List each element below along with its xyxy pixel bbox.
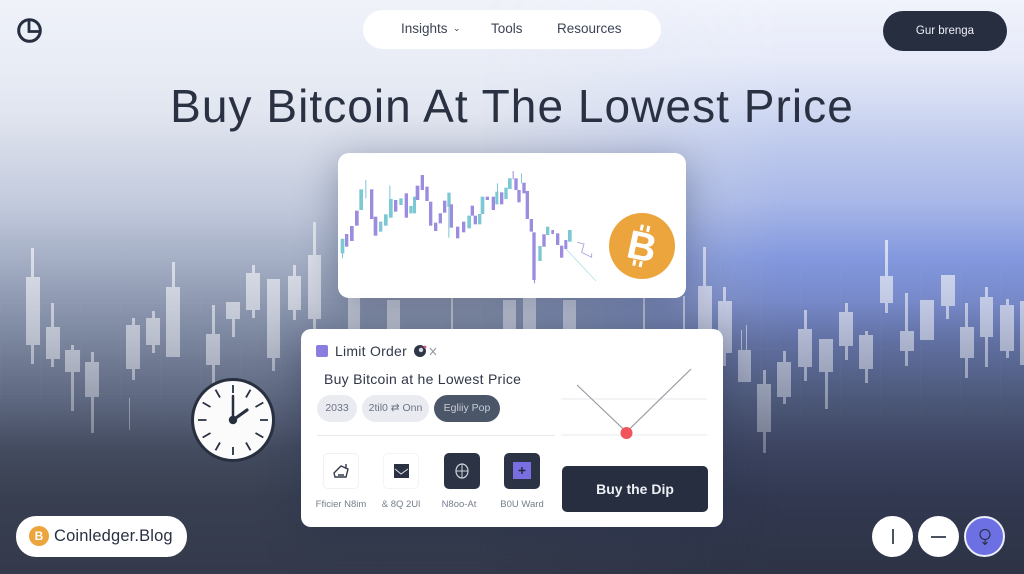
button: buy the dip: Buy the Dip [596,481,674,497]
navigation bar: Resources [557,21,622,36]
limit order heading: Limit Order [335,343,407,359]
order subtitle: Buy Bitcoin at he Lowest Price [324,371,521,387]
navigation bar: Tools [491,21,523,36]
icon tile: second [383,453,419,489]
pill: option: 2til0 ⇄ Onn [369,402,422,414]
icon: clock [191,378,275,462]
panel: limit order [301,329,723,527]
logo icon [17,18,42,43]
brand name: Coinledger.Blog [54,527,173,545]
icon tile: fourth [504,453,540,489]
icon: bitcoin coin [609,213,675,279]
label: third: N8oo-At [442,499,476,510]
icon: small bitcoin: B [35,529,43,543]
round button: bar [872,516,913,557]
label: fourth: B0U Ward [500,499,544,510]
label: second: & 8Q 2Ul [382,499,420,510]
icon tile: third [444,453,480,489]
pill: option [362,395,429,422]
header button: Gur brenga [916,25,974,37]
title: Buy Bitcoin At The Lowest Price [170,80,854,132]
button: buy the dip [562,466,708,512]
navigation bar: ⌄ [453,23,461,33]
navigation bar: Insights [401,21,448,36]
icon tile: first [323,453,359,489]
pill: year [317,395,357,422]
divider [317,435,555,436]
logo badge: Coinledger.Blog [16,516,187,557]
round button: minus [918,516,959,557]
dip diagram [561,368,707,439]
mini candlestick chart [340,171,596,284]
pill: active [434,395,500,422]
pill: active: Egliiy Pop [444,402,490,414]
icon: bitcoin coin: B [623,222,660,272]
pill: year: 2033 [325,402,349,414]
icon: limit order badge [316,345,328,357]
panel: price chart [338,153,686,298]
header button [883,11,1007,51]
navigation bar [363,10,661,49]
icon: small status glyph [414,345,436,357]
label: first: Fficier N8im [316,499,366,510]
icon: small bitcoin [29,526,49,546]
round button: active [964,516,1005,557]
